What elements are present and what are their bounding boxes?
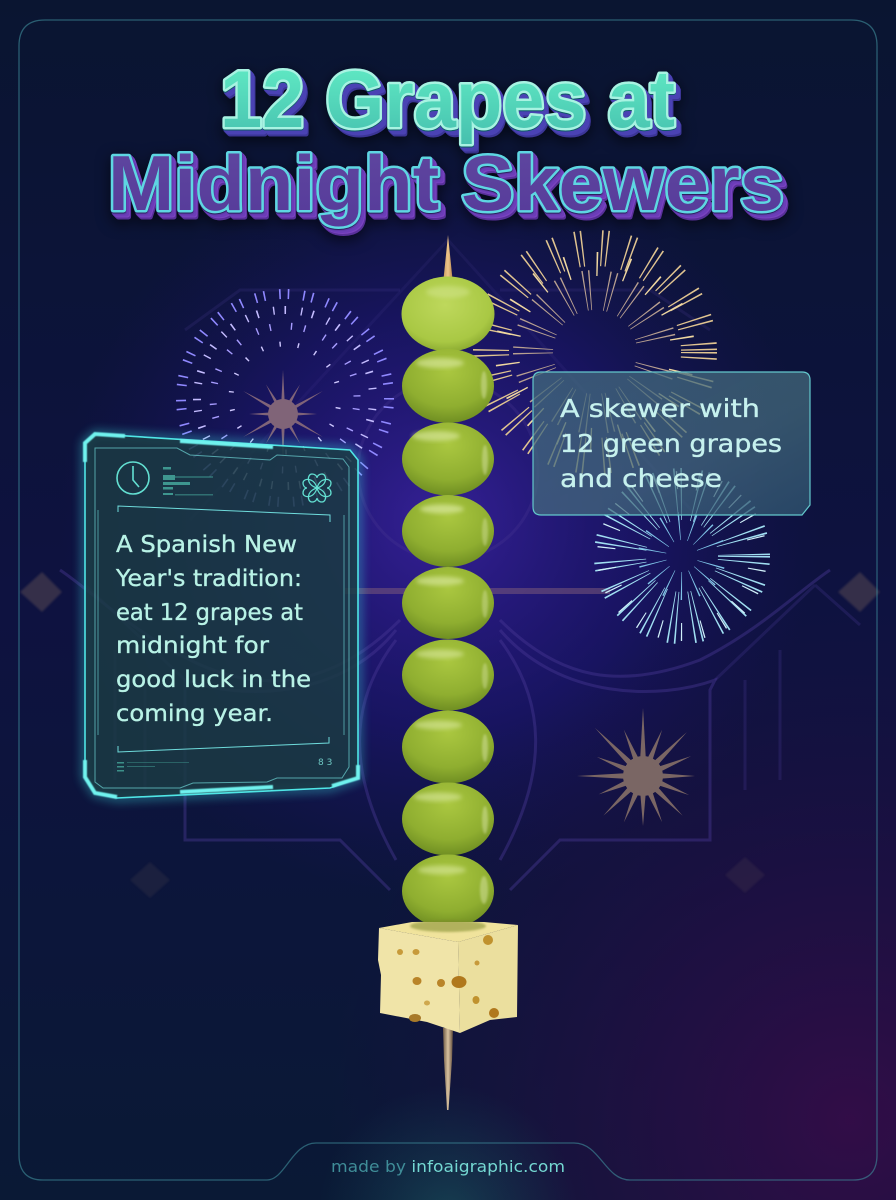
firework: violet burst — [181, 294, 389, 502]
firework: blue burst — [606, 480, 758, 632]
side diamond ornaments — [20, 572, 880, 898]
icon: clock — [117, 462, 149, 494]
grape 8 — [402, 782, 494, 856]
firework: small rose star burst — [242, 370, 324, 460]
horizontal glowing bar — [345, 588, 610, 594]
firework: tan static star — [577, 708, 695, 826]
firework: gold burst — [491, 248, 699, 456]
skewer bottom tip — [443, 1028, 453, 1110]
grape skewer stack — [402, 276, 494, 928]
tiny data bars — [163, 467, 213, 496]
card text — [560, 394, 782, 493]
title line 1: 12 Grapes at — [220, 55, 675, 145]
grape 1 — [402, 276, 494, 352]
skewer top tip — [443, 235, 453, 284]
panel: skewer description — [533, 372, 810, 515]
glass card — [533, 372, 810, 515]
background geometric art-deco lines — [60, 240, 860, 890]
title line 2: Midnight Skewers — [108, 139, 784, 227]
footer credit: made by infoaigraphic.com — [331, 1157, 565, 1176]
card text: and cheese — [560, 464, 722, 493]
card text: 12 green grapes — [560, 429, 782, 458]
grape 5 — [402, 567, 494, 639]
icon: four-leaf clover — [303, 474, 331, 502]
glowing edge segments — [85, 434, 358, 797]
grape 9 — [402, 854, 494, 928]
title — [108, 55, 784, 227]
panel body — [85, 434, 358, 798]
grape 7 — [402, 710, 494, 784]
panel body text: midnight for — [116, 631, 269, 659]
card text: A skewer with — [560, 394, 760, 423]
inner frame — [95, 448, 349, 788]
corner code label: 8 3 — [318, 758, 332, 768]
panel body text: A Spanish New — [116, 530, 297, 558]
panel body text: good luck in the — [116, 665, 311, 693]
grape 2 — [402, 349, 494, 423]
grape 4 — [402, 495, 494, 567]
grape 6 — [402, 640, 494, 710]
panel body text: eat 12 grapes at — [116, 598, 303, 626]
panel: Spanish tradition — [85, 434, 358, 798]
panel body text — [115, 530, 311, 727]
lower tiny data bars — [117, 762, 189, 772]
panel body text: coming year. — [116, 699, 273, 727]
cheese cube — [378, 920, 518, 1033]
grape 3 — [402, 422, 494, 496]
panel soft outer glow — [85, 434, 358, 798]
divider lines — [98, 506, 344, 752]
panel body text: Year's tradition: — [115, 564, 302, 592]
